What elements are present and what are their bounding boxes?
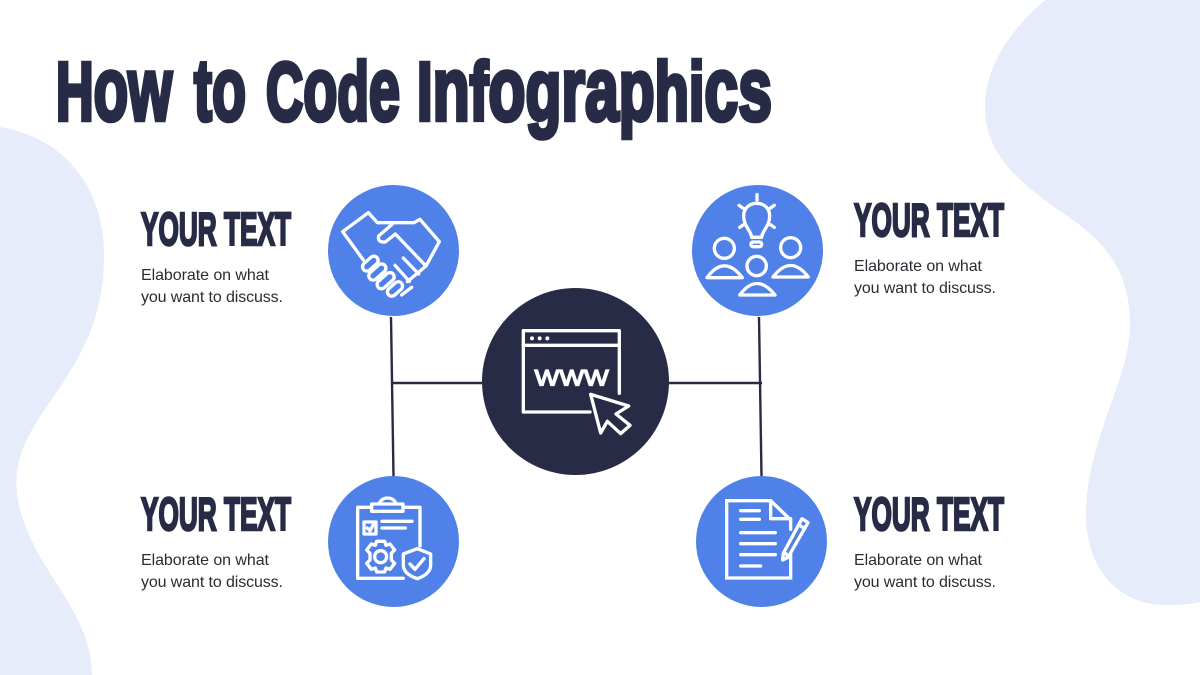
heading: YOUR TEXT: [141, 488, 291, 540]
icon: handshake: [343, 213, 439, 298]
icon: browser window with cursor: [523, 331, 630, 434]
www lettering: WWW: [535, 366, 609, 391]
text block: bottom right: [854, 488, 1004, 591]
node: document: [696, 476, 827, 607]
body: Elaborate on what: [141, 552, 270, 569]
title: Code: [266, 40, 400, 140]
node: team ideas: [692, 185, 823, 316]
node: handshake: [328, 185, 459, 316]
window dots: [530, 336, 549, 340]
heading: YOUR TEXT: [854, 488, 1004, 540]
body: you want to discuss.: [141, 289, 283, 306]
cursor arrow: [591, 394, 630, 434]
title: How: [56, 40, 173, 140]
icon: clipboard with gear and shield: [358, 498, 431, 579]
title: [56, 40, 772, 140]
icon: lightbulb and people: [707, 195, 808, 295]
node: checklist: [328, 476, 459, 607]
icon: document and pencil: [727, 501, 808, 578]
body: you want to discuss.: [854, 280, 996, 297]
body: Elaborate on what: [854, 258, 983, 275]
connector lines: [391, 317, 762, 476]
heading: YOUR TEXT: [854, 194, 1004, 246]
body: you want to discuss.: [141, 574, 283, 591]
background blob: right: [985, 0, 1200, 605]
body: you want to discuss.: [854, 574, 996, 591]
text block: top left: [141, 203, 291, 306]
text block: bottom left: [141, 488, 291, 591]
body: Elaborate on what: [141, 267, 270, 284]
center node: website icon: [482, 288, 669, 475]
heading: YOUR TEXT: [141, 203, 291, 255]
background blob: left: [0, 127, 104, 675]
title: Infographics: [417, 40, 772, 140]
text block: top right: [854, 194, 1004, 297]
body: Elaborate on what: [854, 552, 983, 569]
title: to: [194, 40, 246, 140]
